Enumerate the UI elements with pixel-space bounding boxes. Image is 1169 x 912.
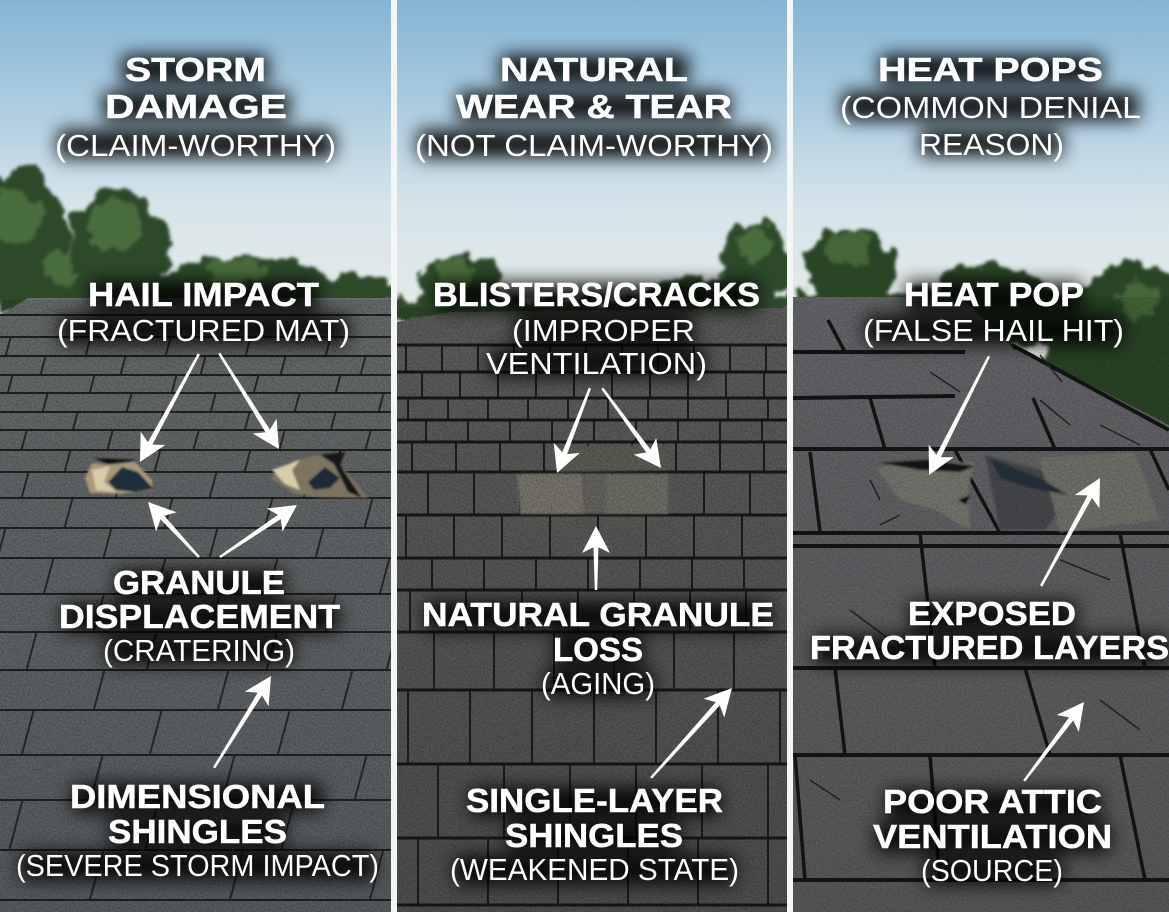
heading: heat pops: (COMMON DENIAL: [840, 90, 1141, 125]
label: heat pop: [863, 276, 1124, 348]
sky: [0, 0, 391, 310]
label: poor attic ventilation: POOR ATTIC: [883, 783, 1102, 820]
roof grain: [0, 300, 391, 912]
halo: title: [20, 55, 375, 880]
label: hail impact: (FRACTURED MAT): [57, 313, 350, 348]
label: granule displacement: DISPLACEMENT: [59, 598, 340, 635]
slab course lines: [793, 345, 1169, 880]
trees: [0, 170, 400, 324]
shingle course lines: [0, 315, 391, 900]
label: exposed fractured layers: [810, 595, 1169, 666]
label: hail impact: [59, 282, 348, 348]
label: dimensional shingles: DIMENSIONAL: [70, 778, 325, 815]
halo: title: [815, 55, 1169, 884]
heading: storm damage: DAMAGE: [105, 88, 287, 125]
heading: storm damage: STORM: [125, 51, 266, 88]
label: single-layer shingles: SHINGLES: [505, 817, 683, 854]
label: heat pop: HEAT POP: [904, 276, 1084, 313]
heading: natural wear and tear: NATURAL: [500, 51, 688, 88]
label: blisters and cracks: VENTILATION): [486, 346, 707, 381]
roof: [0, 298, 391, 912]
label: blisters and cracks: (IMPROPER: [512, 313, 695, 348]
heat pop blister: [876, 460, 975, 530]
heading: storm damage: (CLAIM-WORTHY): [55, 128, 336, 163]
heading: storm damage: [55, 51, 336, 163]
sky: [397, 0, 787, 320]
label: natural granule loss: (AGING): [541, 666, 655, 701]
heading: heat pops: [840, 51, 1141, 162]
label: single-layer shingles: (WEAKENED STATE): [450, 852, 739, 887]
hail damage: right crater: [270, 452, 368, 498]
label: natural granule loss: NATURAL GRANULE: [422, 596, 774, 633]
label: granule displacement: GRANULE: [113, 564, 285, 601]
slab joints: [795, 320, 1169, 880]
hail damage: left crater: [85, 458, 154, 494]
label: poor attic ventilation: [873, 783, 1112, 888]
label: heat pop: (FALSE HAIL HIT): [863, 313, 1124, 348]
trees: [793, 230, 1169, 440]
label: granule displacement: (CRATERING): [103, 633, 295, 668]
label: poor attic ventilation: (SOURCE): [921, 853, 1063, 888]
halo: title: [418, 55, 771, 884]
label: natural granule loss: [422, 596, 774, 701]
shingle joints: [0, 338, 391, 899]
label: exposed fractured layers: EXPOSED: [908, 595, 1076, 632]
roof: [793, 297, 1169, 912]
shingle course lines: [397, 345, 787, 905]
trees: [397, 223, 791, 320]
heading: natural wear and tear: WEAR & TEAR: [456, 88, 732, 125]
label: hail impact: HAIL IMPACT: [88, 276, 319, 313]
label: single-layer shingles: [450, 782, 739, 887]
label: blisters and cracks: [433, 276, 760, 381]
panel: natural wear and tear: [397, 0, 791, 912]
label: granule displacement: [59, 564, 340, 668]
label: poor attic ventilation: VENTILATION: [873, 818, 1112, 855]
panel: heat pops: [793, 0, 1169, 912]
label: dimensional shingles: SHINGLES: [108, 813, 287, 850]
label: dimensional shingles: [16, 778, 379, 883]
heading: heat pops: REASON): [919, 127, 1064, 162]
sky: [793, 0, 1169, 320]
label: exposed fractured layers: FRACTURED LAYERS: [810, 629, 1169, 666]
arrows: heat pops: [917, 350, 1112, 789]
slab cracks: [810, 330, 1140, 800]
roof grain: [397, 308, 787, 912]
heading: natural wear and tear: (NOT CLAIM-WORTHY): [415, 128, 773, 163]
roof grain: [793, 297, 1169, 912]
label: natural granule loss: LOSS: [553, 631, 643, 668]
worn patch with blisters: [517, 444, 670, 514]
arrows: storm damage: [140, 352, 297, 768]
heading: heat pops: HEAT POPS: [878, 51, 1103, 88]
label: dimensional shingles: (SEVERE STORM IMPACT): [16, 848, 379, 883]
roof: [397, 308, 787, 912]
label: blisters and cracks: BLISTERS/CRACKS: [433, 276, 760, 313]
panel: storm damage: [0, 0, 391, 912]
shingle joints: [397, 358, 787, 872]
heading: natural wear and tear: [415, 51, 773, 163]
label: single-layer shingles: SINGLE-LAYER: [466, 782, 723, 819]
exposed fractured layers: [985, 452, 1160, 532]
arrows: wear and tear: [544, 380, 742, 787]
